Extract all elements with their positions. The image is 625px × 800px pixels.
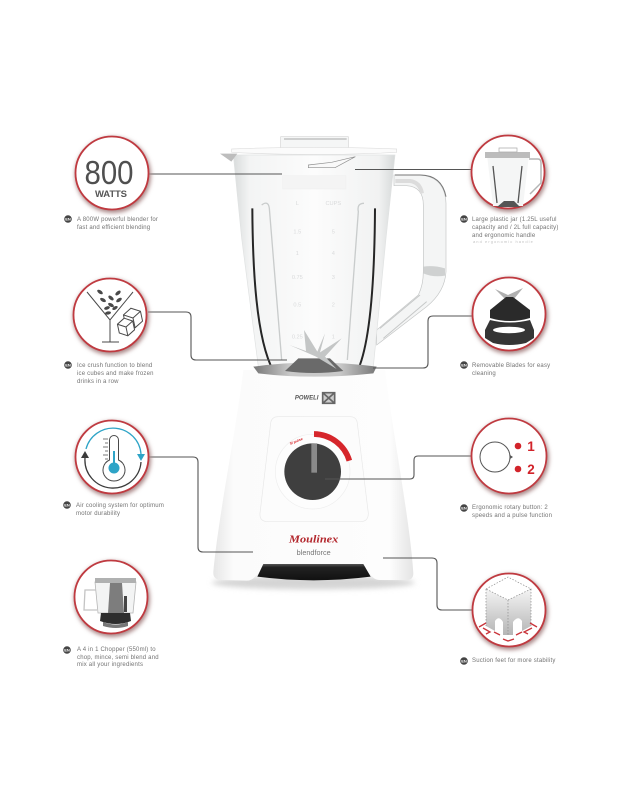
speed arc — [314, 434, 349, 461]
caption: rotary button: speeds and a pulse function — [472, 513, 552, 519]
graduations: 0.75 — [292, 275, 303, 281]
icon: speed dial: 2 — [527, 462, 535, 477]
caption: ice crush: Ice crush function to blend — [77, 363, 152, 369]
blender jar — [220, 137, 446, 377]
caption: air cooling — [63, 501, 164, 517]
blade assembly — [289, 330, 342, 369]
panel: chopper — [63, 560, 159, 668]
caption: removable blades: cleaning — [472, 371, 496, 377]
graduations — [292, 201, 341, 340]
graduations: 1 — [332, 334, 335, 340]
caption: suction feet: EN — [461, 658, 467, 664]
caption: rotary button — [460, 504, 552, 519]
dark ribs — [252, 208, 273, 371]
caption: chopper: chop, mince, semi blend and — [77, 655, 159, 661]
caption: suction feet — [460, 657, 556, 665]
caption: 800 watts: A 800W powerful blender for — [77, 217, 158, 223]
caption: ice crush — [64, 361, 154, 385]
caption: 800 watts: fast and efficient blending — [77, 225, 150, 231]
pulse label: 0/ pulse — [289, 437, 303, 446]
graduations: 4 — [332, 251, 335, 257]
caption: chopper — [63, 646, 159, 668]
icon: speed dial: 1 — [527, 439, 535, 454]
graduations: 2 — [332, 303, 335, 309]
caption: plastic jar — [460, 215, 559, 244]
caption: chopper: EN — [64, 648, 70, 652]
panel: removable blades — [460, 278, 550, 377]
handle — [377, 175, 446, 345]
caption: 800 watts: EN — [65, 216, 71, 222]
rotary knob — [284, 443, 341, 500]
panel: air cooling — [63, 420, 164, 517]
panel: 800 watts — [64, 136, 158, 231]
caption: plastic jar: EN — [461, 216, 467, 222]
caption: ice crush: ice cubes and make frozen — [77, 371, 154, 377]
caption: ice crush: drinks in a row — [77, 379, 119, 385]
panel: ice crush — [64, 278, 154, 385]
caption: chopper: A 4 in 1 Chopper (550ml) to — [77, 647, 156, 653]
label area — [283, 176, 346, 189]
icon: blade unit — [485, 288, 534, 345]
caption: air cooling: motor durability — [76, 511, 120, 517]
icon: small jar — [485, 148, 541, 207]
graduations: 5 — [332, 229, 335, 235]
caption: rotary button: Ergonomic rotary button: 2 — [472, 505, 548, 511]
caption: 800 watts — [64, 215, 158, 231]
leader lines — [148, 170, 472, 610]
caption: removable blades — [460, 361, 550, 377]
moulinex logo: Moulinex — [288, 534, 338, 545]
caption: chopper: mix all your ingredients — [77, 662, 143, 668]
lid — [281, 137, 348, 149]
blendforce label: blendforce — [297, 550, 331, 557]
caption: removable blades: EN — [461, 362, 467, 368]
icon: cube on suction feet — [479, 577, 537, 641]
panel: plastic jar — [460, 136, 559, 244]
graduations: L — [296, 201, 299, 207]
caption: air cooling: EN — [64, 502, 70, 508]
caption: ice crush: EN — [65, 362, 71, 368]
inner ribs — [262, 203, 364, 360]
graduations: 1.5 — [293, 229, 301, 235]
panel: 800 watts: WATTS — [95, 189, 127, 200]
caption: plastic jar: and ergonomic handle — [473, 239, 534, 244]
blender — [212, 137, 446, 589]
caption: plastic jar: Large plastic jar (1.25L useful — [472, 217, 557, 223]
caption: removable blades: Removable Blades for easy — [472, 363, 550, 369]
icon: cocktail glass with ice — [87, 289, 144, 342]
metal ring — [253, 362, 377, 377]
caption: air cooling: Air cooling system for optimum — [76, 503, 164, 509]
spout — [220, 154, 237, 162]
poweli logo: POWELI — [295, 395, 319, 401]
caption: plastic jar: and ergonomic handle — [472, 233, 536, 239]
icon: speed dial — [480, 439, 535, 477]
icon: 800 watts: 800 — [84, 154, 134, 191]
icon: chopper bowl — [84, 578, 136, 628]
graduations: CUPS — [325, 201, 341, 207]
control panel — [260, 417, 368, 522]
jar body — [233, 155, 395, 374]
graduations: 0.5 — [293, 303, 301, 309]
graduations: 0.25 — [292, 334, 303, 340]
panel: suction feet — [460, 574, 556, 665]
caption: plastic jar: capacity and / 2L full capacity) — [472, 225, 559, 231]
blender base — [212, 370, 415, 589]
caption: suction feet: Suction feet for more stability — [472, 658, 556, 664]
icon: thermometer with arrows — [81, 428, 145, 488]
panel: rotary button — [460, 418, 552, 519]
graduations: 3 — [332, 275, 335, 281]
caption: rotary button: EN — [461, 506, 467, 510]
graduations: 1 — [296, 251, 299, 257]
